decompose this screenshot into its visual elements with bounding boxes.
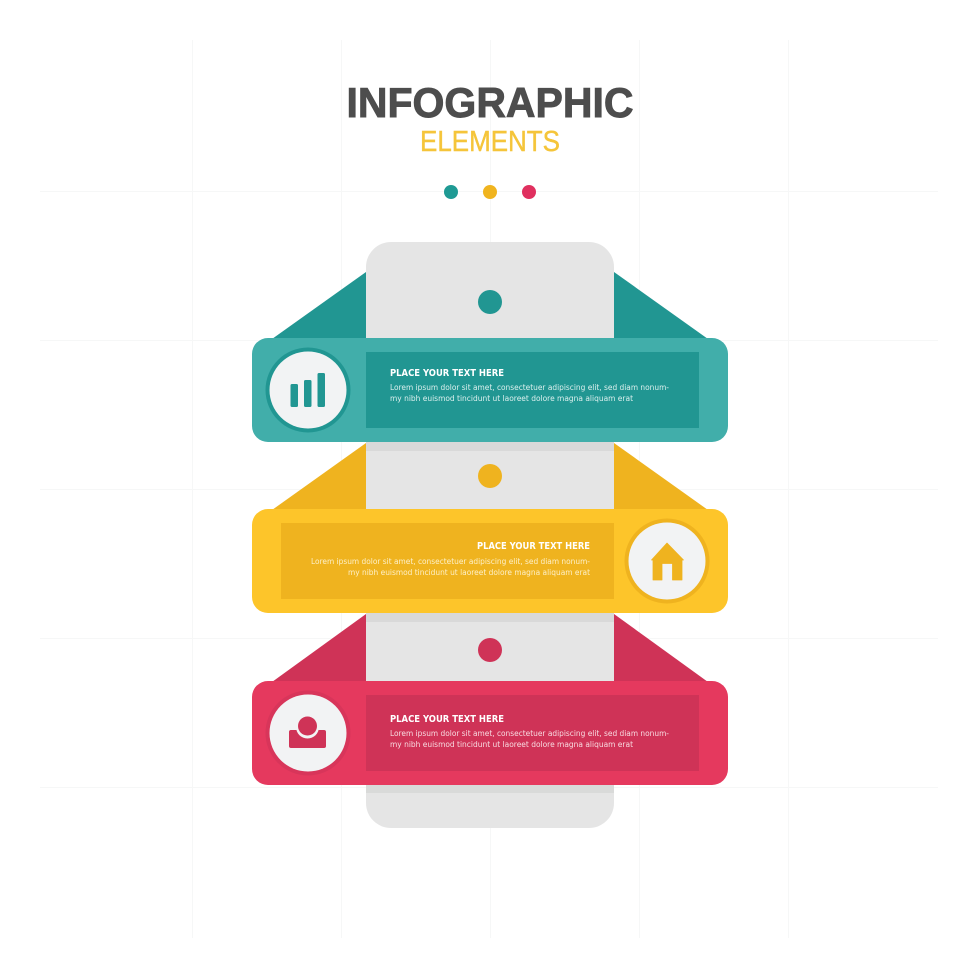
yellow fold triangles <box>272 443 708 510</box>
body: teal: my nibh euismod tincidunt ut laoreet dolore magna aliquam erat <box>390 394 633 403</box>
icon: bar chart <box>266 348 350 432</box>
banner: teal <box>252 338 728 442</box>
body: teal: Lorem ipsum dolor sit amet, consectetuer adipiscing elit, sed diam nonum- <box>390 383 669 392</box>
teal fold triangles <box>272 272 708 339</box>
panel dot: teal <box>478 290 502 314</box>
text panel: yellow <box>281 523 614 599</box>
banner: red <box>252 681 728 785</box>
text panel: red <box>366 695 699 771</box>
body: red: my nibh euismod tincidunt ut laoreet dolore magna aliquam erat <box>390 740 633 749</box>
body: red <box>390 729 669 749</box>
title: INFOGRAPHIC <box>346 79 634 126</box>
body: teal <box>390 383 669 403</box>
central grey panel <box>366 242 614 828</box>
banner: yellow <box>252 509 728 613</box>
icon: user <box>266 690 350 776</box>
red fold triangles <box>272 614 708 682</box>
body: red: Lorem ipsum dolor sit amet, consectetuer adipiscing elit, sed diam nonum- <box>390 729 669 738</box>
body: yellow <box>311 557 590 577</box>
body: yellow: Lorem ipsum dolor sit amet, consectetuer adipiscing elit, sed diam nonum- <box>311 557 590 566</box>
body: yellow: my nibh euismod tincidunt ut laoreet dolore magna aliquam erat <box>348 568 590 577</box>
heading: red: PLACE YOUR TEXT HERE <box>390 714 504 725</box>
heading: teal: PLACE YOUR TEXT HERE <box>390 368 504 379</box>
text panel: teal <box>366 352 699 428</box>
icon: house <box>624 518 710 604</box>
heading: yellow: PLACE YOUR TEXT HERE <box>477 541 590 552</box>
panel dot: yellow <box>478 464 502 488</box>
subtitle: ELEMENTS <box>420 126 560 158</box>
header dots <box>444 185 536 199</box>
panel dot: red <box>478 638 502 662</box>
